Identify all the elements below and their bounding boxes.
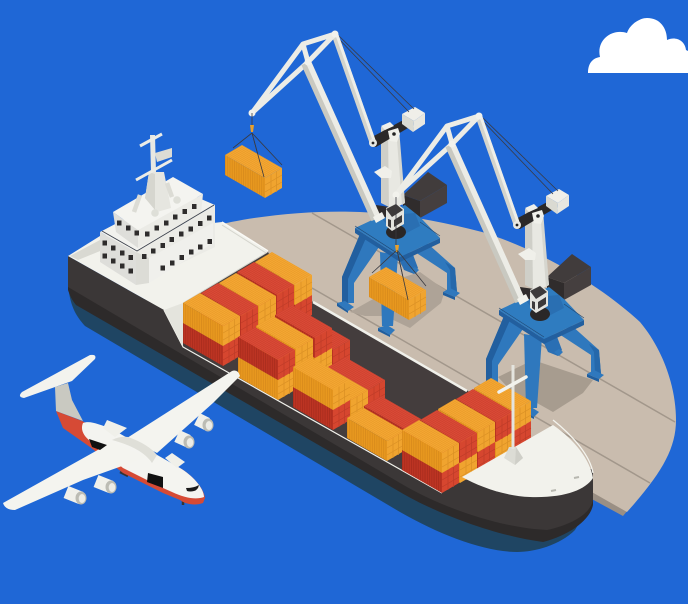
foremast xyxy=(499,365,526,465)
cargo doors xyxy=(89,439,107,450)
bow deck xyxy=(462,425,593,497)
bollards xyxy=(551,477,579,491)
radar mast xyxy=(145,172,171,212)
tail fin xyxy=(55,383,83,421)
bay 1 xyxy=(255,272,312,325)
rail: dock side xyxy=(313,302,467,391)
rail: waterline side xyxy=(164,310,442,493)
bay 5 xyxy=(474,398,531,451)
hull: upper xyxy=(68,256,593,530)
bay 3 xyxy=(328,357,385,410)
stern deck xyxy=(68,222,268,347)
lower block xyxy=(100,232,136,285)
crane shadow 2 xyxy=(498,360,593,412)
cockpit window xyxy=(186,485,199,492)
windows xyxy=(103,204,212,273)
crane 1 hook and hanging container xyxy=(225,113,282,198)
upper block xyxy=(113,212,138,248)
container stacks xyxy=(183,252,531,493)
wing root xyxy=(112,437,157,463)
crane 2 hook and hanging container xyxy=(369,197,426,320)
icon: cloud xyxy=(588,18,688,73)
dock xyxy=(210,212,676,516)
left engines xyxy=(66,480,116,504)
stabilizer xyxy=(20,355,95,398)
crane shadow 1 xyxy=(350,272,445,328)
right wing xyxy=(127,371,240,453)
superstructure xyxy=(100,134,215,285)
railing xyxy=(102,205,214,251)
dock lane lines xyxy=(312,213,675,483)
hold xyxy=(182,252,475,493)
roof xyxy=(113,177,203,230)
right engines xyxy=(177,418,214,448)
landing gear xyxy=(120,472,183,505)
bay 4 xyxy=(364,396,421,449)
fairings xyxy=(103,420,127,437)
hull: dark band xyxy=(68,270,593,542)
ship xyxy=(68,134,593,552)
crane 2 xyxy=(392,112,604,419)
left wing xyxy=(3,442,147,510)
annex xyxy=(149,223,213,283)
bay 2 xyxy=(293,317,350,370)
crane 1 xyxy=(248,30,460,337)
fuselage xyxy=(56,411,205,504)
hull: waterline xyxy=(68,285,593,552)
bow rail xyxy=(553,420,593,473)
airplane xyxy=(3,355,240,510)
fuselage top xyxy=(82,422,204,498)
